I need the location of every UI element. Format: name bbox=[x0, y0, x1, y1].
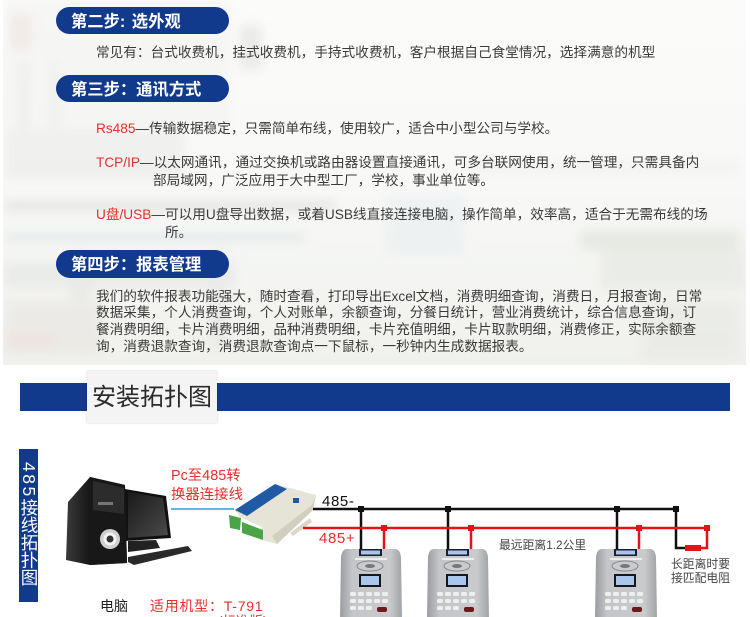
Rs485 description: Rs485—传输数据稳定，只需简单布线，使用较广，适合中小型公司与学校。 bbox=[96, 121, 558, 136]
TCP/IP description: 部局域网，广泛应用于大中型工厂，学校，事业单位等。 bbox=[153, 173, 494, 188]
step 4 text: 询，消费退款查询，消费退款查询点一下鼠标，一秒钟内生成数据报表。 bbox=[96, 339, 533, 354]
label: PC to converter cable: 换器连接线 bbox=[171, 486, 243, 502]
label: resistor note: 接匹配电阻 bbox=[671, 571, 730, 585]
step 2 heading: 第二步: 选外观 bbox=[71, 13, 181, 31]
label: applicable model: 适用机型：T-791 bbox=[150, 598, 263, 614]
step 2 heading bbox=[56, 7, 229, 34]
TCP/IP description bbox=[96, 155, 699, 188]
icon: monitor bbox=[125, 489, 171, 552]
icon: keyboard bbox=[128, 546, 192, 565]
wire junction nodes bbox=[358, 506, 710, 531]
step 4 heading: 第四步：报表管理 bbox=[71, 256, 201, 274]
step 4 text bbox=[96, 288, 702, 354]
label: max distance: 最远距离1.2公里 bbox=[499, 538, 586, 552]
icon: terminal 1 bbox=[340, 549, 402, 617]
vertical label: 485 接线拓扑图 bbox=[19, 462, 39, 586]
label: resistor note bbox=[671, 556, 730, 585]
icon: computer tower bbox=[66, 477, 127, 565]
step 3 heading bbox=[56, 75, 229, 102]
black 485- bus wire bbox=[313, 509, 686, 550]
icon: 485 converter bbox=[229, 484, 316, 544]
USB description bbox=[96, 207, 708, 240]
step 3 heading: 第三步：通讯方式 bbox=[71, 81, 201, 99]
step 4 text: 我们的软件报表功能强大，随时查看，打印导出Excel文档，消费明细查询，消费日，月报查询，日常 bbox=[96, 288, 702, 304]
step 4 heading bbox=[56, 250, 229, 278]
icon: terminal 2 bbox=[427, 549, 489, 617]
step 4 text: 餐消费明细，卡片消费明细，品种消费明细，卡片充值明细，卡片取款明细，消费修正，实际余额查 bbox=[96, 322, 696, 337]
icon: terminal 3 bbox=[595, 549, 657, 617]
label: PC to converter cable bbox=[171, 468, 243, 502]
step 4 text: 数据采集，个人消费查询，个人对账单，余额查询，分餐日统计，营业消费统计，综合信息查询，订 bbox=[96, 305, 696, 320]
label: 485 minus: 485- bbox=[322, 493, 354, 510]
matching resistor bbox=[685, 545, 701, 551]
label: 485 plus: 485+ bbox=[319, 530, 355, 547]
red 485+ bus wire bbox=[303, 528, 707, 550]
USB description: U盘/USB—可以用U盘导出数据，或着USB线直接连接电脑，操作简单，效率高，适合于无需布线的场 bbox=[96, 207, 708, 222]
label: resistor note: 长距离时要 bbox=[671, 556, 730, 570]
step 2 text: 常见有：台式收费机，挂式收费机，手持式收费机，客户根据自己食堂情况，选择满意的机型 bbox=[96, 45, 655, 60]
label: computer: 电脑 bbox=[100, 598, 128, 614]
TCP/IP description: TCP/IP—以太网通讯，通过交换机或路由器设置直接通讯，可多台联网使用，统一管理，只需具备内 bbox=[96, 155, 699, 170]
USB description: 所。 bbox=[165, 225, 192, 240]
section title bbox=[87, 371, 217, 423]
section title: 安装拓扑图 bbox=[92, 384, 212, 411]
wire: PC to converter bbox=[171, 508, 234, 510]
section banner bar bbox=[20, 383, 730, 411]
label: PC to converter cable: Pc至485转 bbox=[171, 468, 241, 484]
